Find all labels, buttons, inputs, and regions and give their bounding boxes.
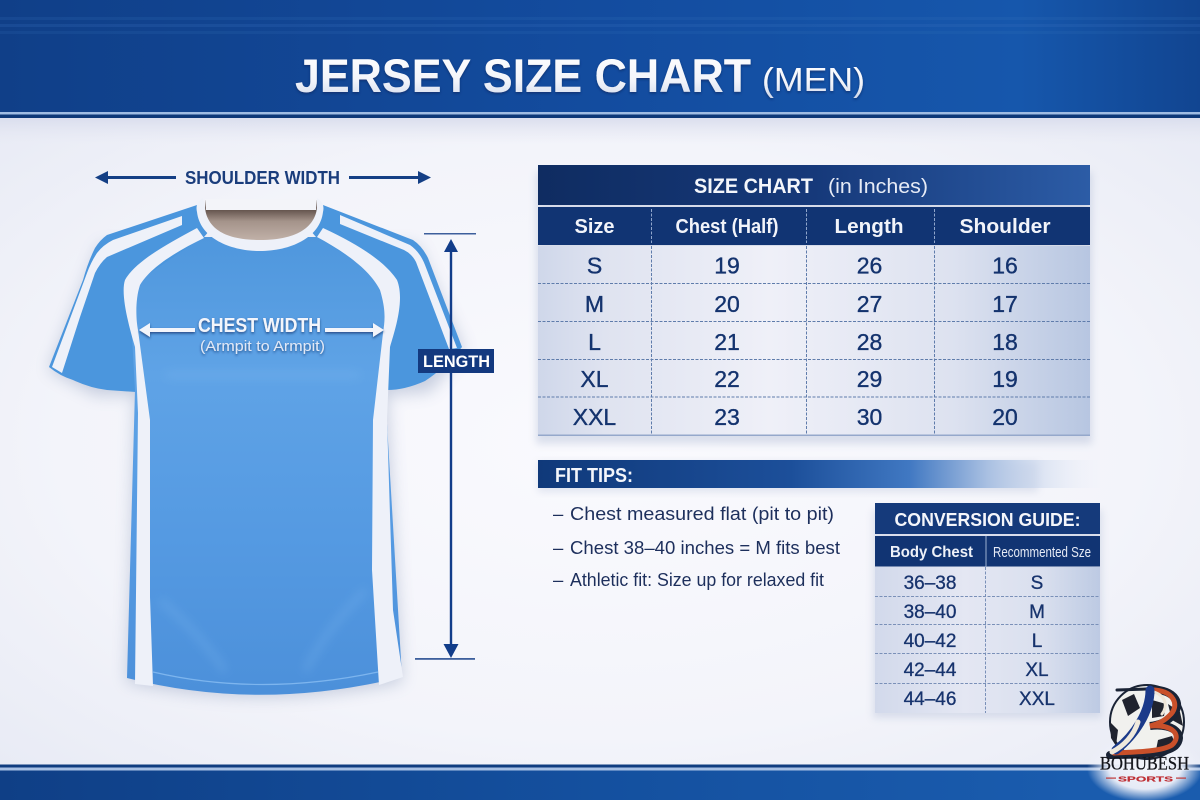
conversion guide rows [875,567,1100,713]
conversion guide rows: L [1032,631,1042,652]
logo wordmark: BOHUBESH [1100,754,1189,774]
conversion guide rows: XXL [1019,689,1055,710]
size chart rows: S [587,252,602,278]
conversion guide title: CONVERSION GUIDE: [894,509,1080,530]
chest width arrow and labels: (Armpit to Armpit) [200,339,325,355]
neck [205,200,317,241]
fit tips list: – [553,503,564,524]
right raglan panel [317,228,403,685]
size chart rows: 18 [992,329,1018,355]
panel: conversion guide [873,503,1102,718]
size chart rows: M [585,291,604,317]
fit tips list: – [553,569,564,590]
size chart rows: XXL [573,404,616,430]
size chart rows: 19 [992,366,1018,392]
title: (MEN) [762,61,865,98]
length label [418,349,494,373]
left raglan panel [124,228,204,686]
conversion guide rows: S [1031,573,1043,594]
logo: Bohubesh Sports [1087,685,1200,800]
soccer ball [1110,685,1184,759]
conversion guide rows: M [1029,602,1045,623]
size chart column headers: Shoulder [960,216,1051,238]
size chart rows: 21 [714,329,740,355]
chest width arrow and labels: CHEST WIDTH [198,315,321,337]
fit tips list [553,503,840,590]
size chart title bar [538,165,1090,205]
size chart title bar: SIZE CHART [694,175,813,198]
length label: LENGTH [423,353,490,371]
size chart rows: 30 [857,404,882,430]
fit tips list: Chest measured flat (pit to pit) [570,503,834,524]
size chart rows: 22 [714,366,740,392]
left sleeve [49,205,210,392]
size chart rows: 29 [857,366,882,392]
fit tips list: Chest 38–40 inches = M fits best [570,537,840,558]
size chart rows [538,209,1090,436]
letter B swoosh [1110,689,1179,755]
left shoulder stripe [52,216,182,373]
conversion guide column headers: Recommented Sze [993,544,1091,561]
shoulder width dimension [95,168,431,188]
jersey shadow [49,245,464,697]
jersey body [127,237,402,695]
size chart column headers: Size [574,216,614,238]
size chart rows: XL [580,366,609,392]
conversion guide rows: 40–42 [904,631,956,652]
conversion guide column headers: Body Chest [890,544,974,561]
size chart rows: 23 [714,404,740,430]
right sleeve [310,205,462,390]
conversion guide title [875,503,1100,534]
conversion guide column headers [875,536,1100,567]
size chart rows: 26 [857,252,882,278]
length dimension [415,233,494,660]
jersey illustration [49,198,464,697]
size chart rows: 27 [857,291,882,317]
panel: size chart [536,165,1092,444]
footer banner [0,764,1200,800]
conversion guide rows: 38–40 [904,602,956,623]
header banner [0,0,1200,118]
size chart column headers: Length [834,216,904,238]
conversion guide rows: XL [1025,660,1049,681]
conversion guide rows: 36–38 [904,573,956,594]
size chart rows: 16 [992,252,1018,278]
size chart rows: 19 [714,252,740,278]
size chart column headers [538,207,1090,245]
title: JERSEY SIZE CHART [295,49,751,102]
size chart rows: 28 [857,329,882,355]
back collar band [205,199,317,210]
collar [197,198,323,251]
fit tips list: – [553,537,564,558]
fabric folds [160,375,366,672]
size chart column headers: Chest (Half) [676,216,778,238]
size chart rows: 20 [714,291,740,317]
shoulder width dimension: SHOULDER WIDTH [185,168,340,188]
fit tips heading: FIT TIPS: [555,465,633,487]
conversion guide rows: 42–44 [904,660,957,681]
conversion guide rows: 44–46 [904,689,956,710]
size chart title bar: (in Inches) [828,176,928,198]
size chart rows: 20 [992,404,1018,430]
right shoulder stripe [340,215,457,349]
logo tagline: SPORTS [1118,774,1173,784]
size chart rows: 17 [992,291,1018,317]
chest width arrow and labels [139,315,384,355]
fit tips heading [538,460,1100,492]
size chart rows: L [588,329,601,355]
fit tips list: Athletic fit: Size up for relaxed fit [570,569,824,590]
hem stitching [153,672,378,684]
